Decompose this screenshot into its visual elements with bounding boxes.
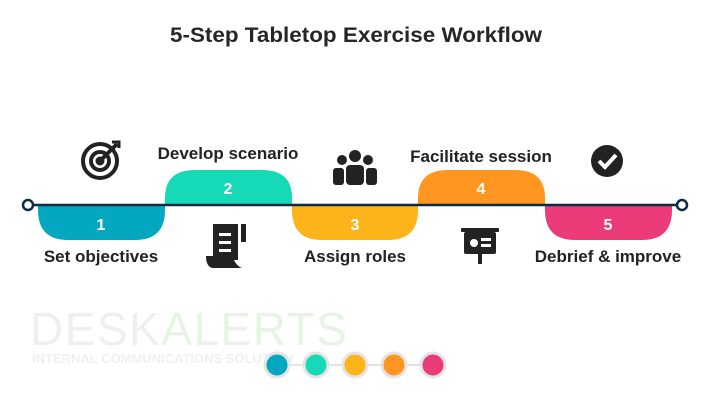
icon: check [591,145,623,177]
watermark: DESKALERTS [30,303,348,355]
labels: Debrief & improve [535,247,681,266]
labels: Facilitate session [410,147,552,166]
labels: Develop scenario [158,144,298,163]
step 5 shape: 5 [604,217,613,234]
icon: script [206,224,246,268]
step 3 shape: 3 [351,217,360,234]
title: 5-Step Tabletop Exercise Workflow [170,24,543,47]
labels [44,144,681,266]
step 4 shape [418,170,545,204]
labels: Set objectives [44,247,158,266]
labels: Assign roles [304,247,406,266]
dots legend [265,353,445,377]
step 4 shape: 4 [477,181,486,198]
step 2 shape: 2 [224,181,233,198]
step 5 shape [545,204,672,240]
icon: presentation [461,228,499,264]
step 1 shape [38,204,165,240]
step 3 shape [292,204,418,240]
icon: team [333,150,377,185]
watermark: INTERNAL COMMUNICATIONS SOLUTION [32,351,293,366]
timeline line [23,200,687,210]
step 2 shape [165,170,292,204]
icon: target [83,142,119,178]
step 1 shape: 1 [97,217,106,234]
